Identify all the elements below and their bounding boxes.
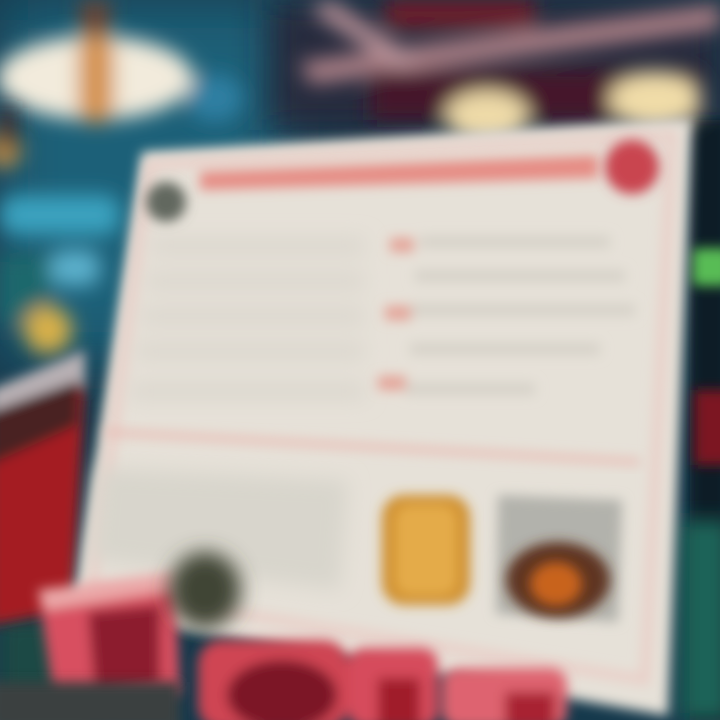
red and white foreground blocks: [0, 552, 567, 720]
orange cylinder photo: [382, 495, 470, 605]
paper document: [72, 118, 692, 716]
left text block: [130, 238, 365, 399]
upper right awning and lights: [300, 0, 720, 142]
dark round badge: [146, 182, 186, 222]
grey photo with food: [496, 495, 622, 622]
blue bokeh, left side: [0, 108, 120, 354]
ceiling lamp, upper left: [0, 0, 243, 123]
right text block with red bullets: [378, 236, 635, 395]
red counter at left: [0, 350, 85, 625]
lower divider line: [105, 432, 640, 462]
red round badge: [605, 140, 659, 194]
pink border on document: [92, 135, 672, 680]
green and red bokeh at right edge: [692, 248, 720, 465]
heading band: [200, 155, 598, 190]
lower left grey text panel: [92, 468, 348, 590]
